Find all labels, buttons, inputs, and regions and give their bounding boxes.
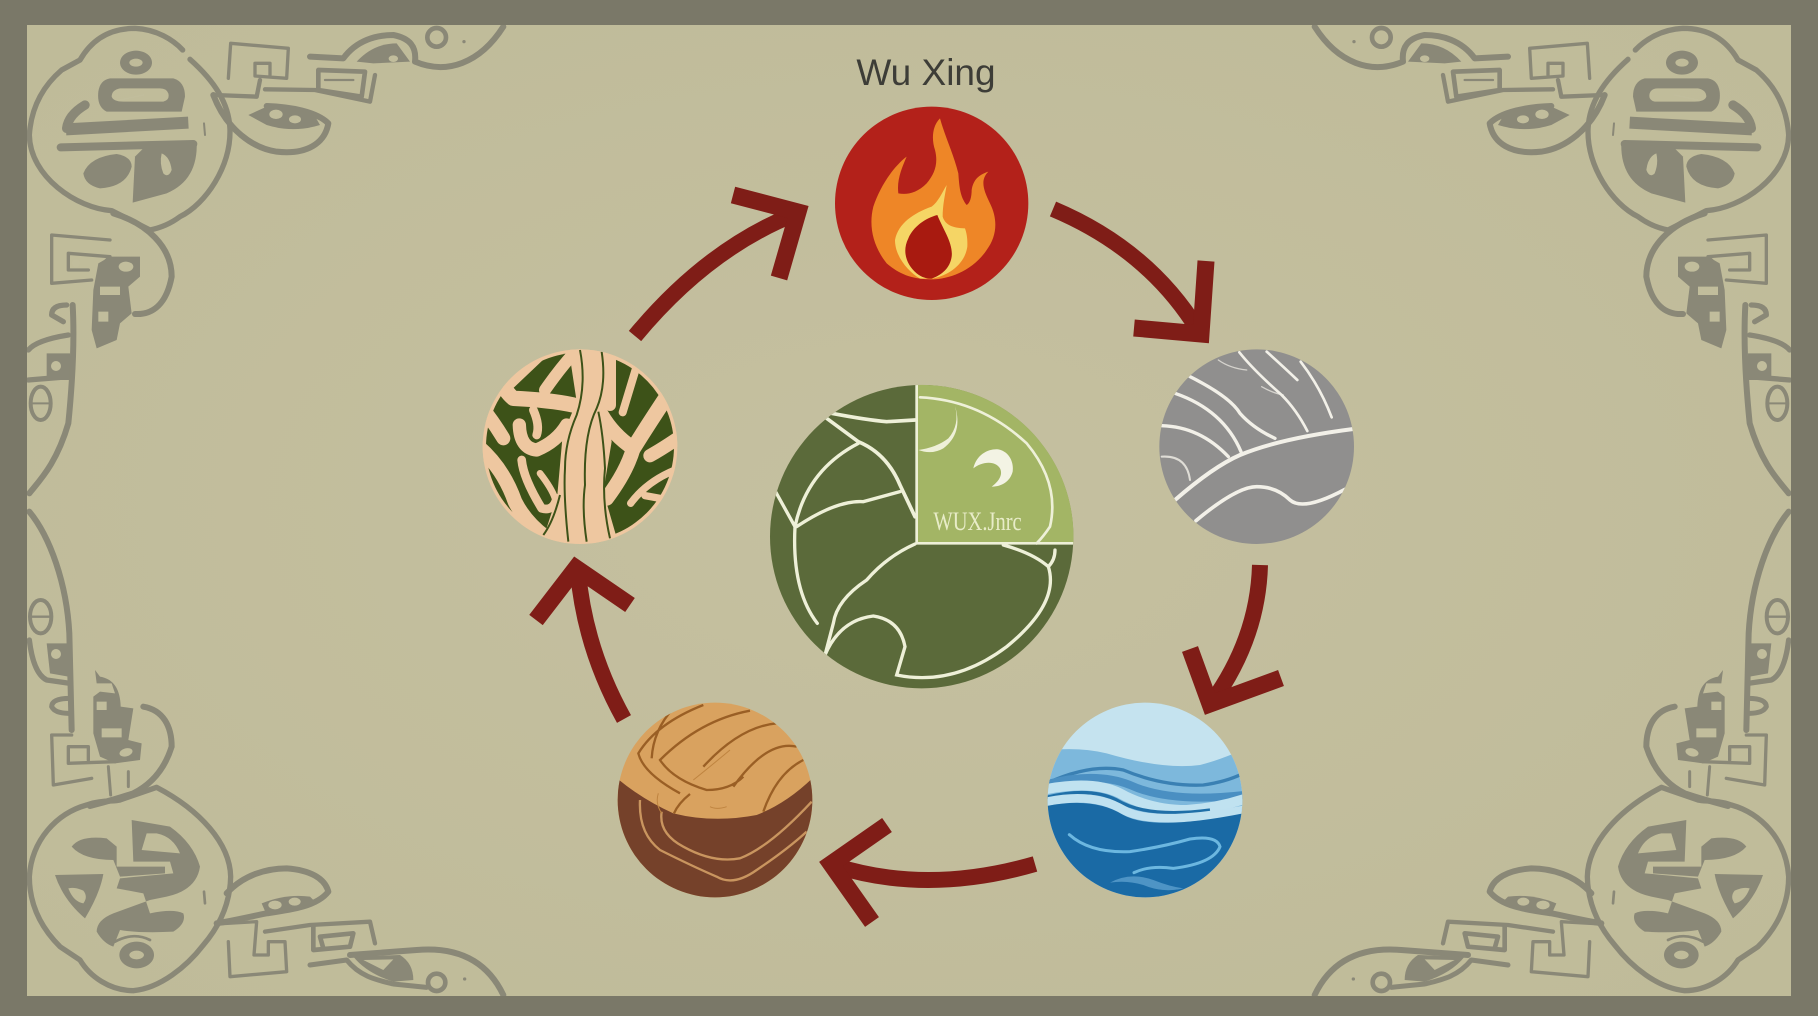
element: earth (613, 703, 813, 903)
arrow: wood to fire (635, 195, 798, 336)
arrow: earth to wood (536, 568, 630, 719)
arrow: metal to water (1190, 565, 1281, 704)
corner ornament: bottom right (1315, 512, 1789, 995)
light quadrant (917, 385, 1073, 543)
arrow: water to earth (831, 825, 1035, 922)
green ground (486, 353, 674, 541)
element: wood (478, 345, 685, 544)
title: Wu Xing (856, 52, 996, 93)
corner ornament: bottom left (29, 512, 503, 995)
corner ornament: top right (1315, 27, 1790, 493)
corner ornament: top left (28, 27, 503, 493)
element: water (1048, 702, 1242, 898)
crescent moons (918, 406, 957, 452)
flame outer (871, 118, 995, 279)
flame core (905, 215, 952, 279)
flame inner (895, 185, 967, 279)
emblem label: WUX.Jnrc (933, 507, 1022, 536)
central emblem (770, 383, 1073, 688)
element: metal (1159, 349, 1354, 544)
branches (478, 345, 685, 543)
arrow: fire to metal (1053, 209, 1206, 334)
element: fire (835, 107, 1028, 300)
